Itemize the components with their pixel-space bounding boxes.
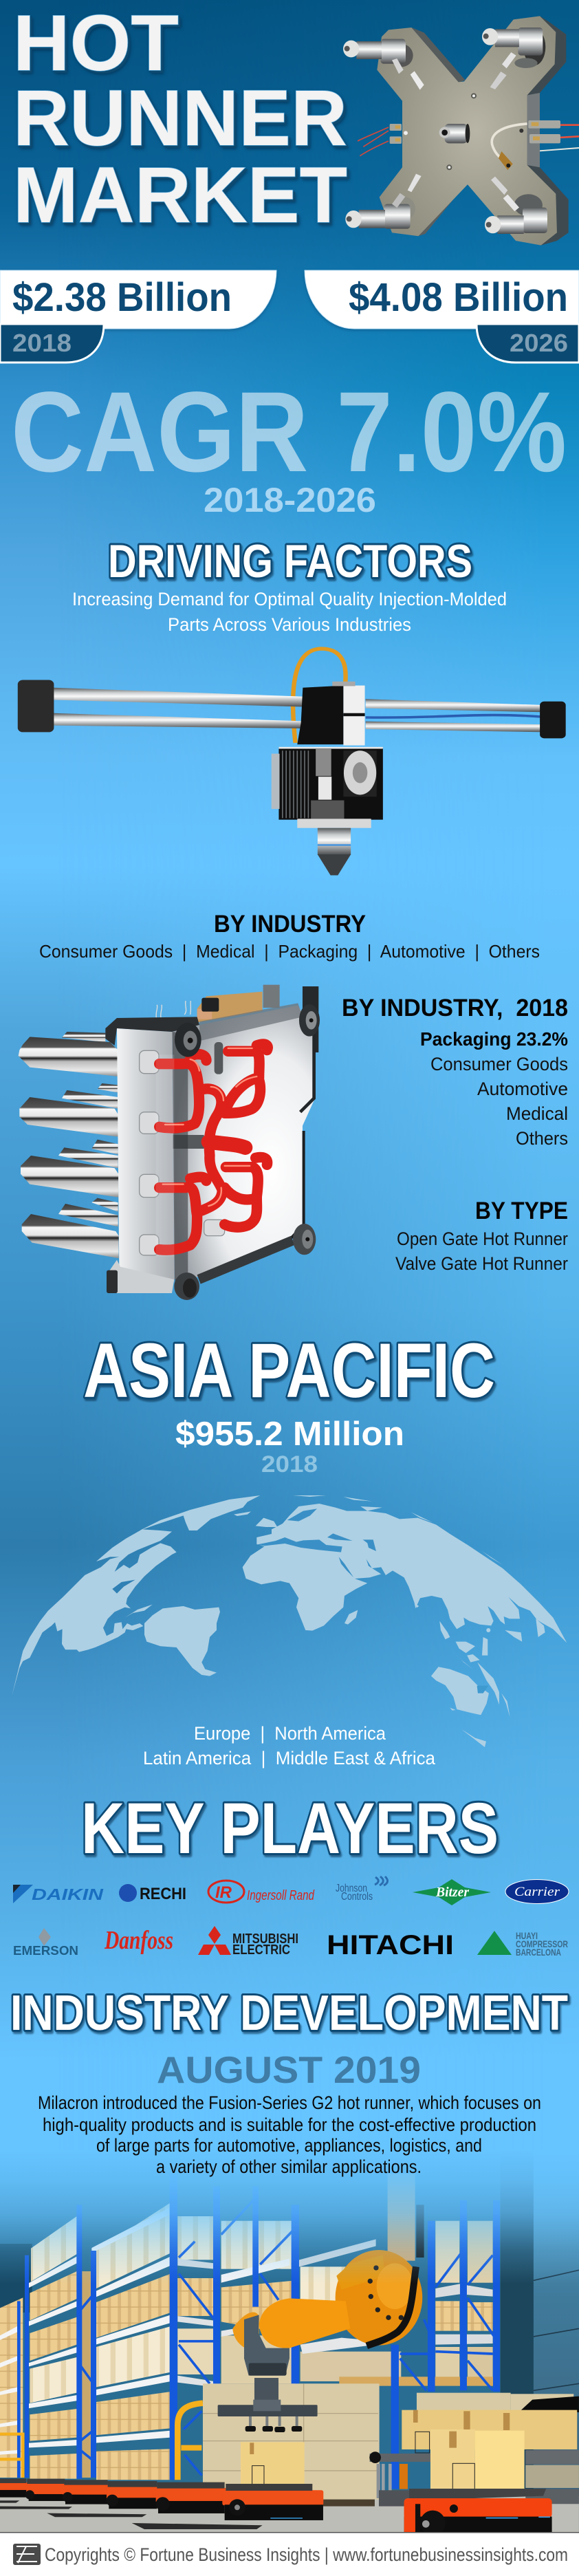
logos row two: Danfoss <box>104 1926 173 1955</box>
logos row two: HITACHI <box>327 1930 454 1960</box>
logos row one: Bitzer <box>435 1885 469 1900</box>
development text <box>38 2092 541 2177</box>
stat: 2018 market size: 2018 <box>12 329 72 357</box>
stat: 2026 market size <box>305 270 579 362</box>
rack uprights <box>19 2174 496 2489</box>
title: RUNNER <box>13 74 347 162</box>
heading: by industry: BY INDUSTRY <box>214 911 366 938</box>
logos row one: RECHI <box>140 1885 186 1903</box>
logos row two <box>13 1926 568 1960</box>
image: hot runner manifold plate <box>343 16 579 246</box>
list: by industry 2018 <box>342 995 568 1149</box>
warehouse top fade <box>0 2150 579 2284</box>
nozzle: top left <box>343 39 424 90</box>
warehouse scene <box>0 2141 579 2535</box>
list: by industry 2018: Automotive <box>477 1079 568 1099</box>
logos row one: IR <box>215 1883 232 1902</box>
industry list: Consumer Goods | Medical | Packaging | Automotive | Others <box>39 941 540 962</box>
logos row one: Controls <box>341 1891 373 1903</box>
logos row one <box>13 1876 569 1905</box>
title: HOT <box>13 0 179 87</box>
list: by industry 2018: Medical <box>506 1103 568 1124</box>
world map <box>12 1495 567 1747</box>
AGV robots <box>0 2478 552 2535</box>
title <box>13 0 347 239</box>
CAGR period: 2018-2026 <box>204 481 376 519</box>
floor plates <box>0 2500 263 2529</box>
stat: 2018 market size: $2.38 Billion <box>12 275 232 320</box>
nozzle: bottom left <box>345 174 422 229</box>
footer <box>0 2532 579 2576</box>
storage racks shelves <box>0 2207 493 2455</box>
development text: of large parts for automotive, appliances, logistics, and <box>96 2135 482 2156</box>
heading: key players: KEY PLAYERS <box>81 1788 499 1869</box>
image: linear rail print head <box>18 649 566 875</box>
other regions list: Latin America | Middle East & Africa <box>143 1748 436 1768</box>
logos row one: Ingersoll Rand <box>247 1888 315 1903</box>
list: by industry 2018: Consumer Goods <box>430 1054 568 1074</box>
list: by type: BY TYPE <box>475 1198 568 1224</box>
heading: driving factors: DRIVING FACTORS <box>108 535 472 587</box>
nozzle: top right <box>482 28 545 89</box>
list: by type <box>395 1198 568 1274</box>
list: by industry 2018: BY INDUSTRY, 2018 <box>342 995 568 1021</box>
nozzle: bottom right <box>485 177 547 234</box>
development text: a variety of other similar applications. <box>156 2156 422 2177</box>
driving factors text: Increasing Demand for Optimal Quality Injection-Molded <box>72 589 507 609</box>
date: AUGUST 2019 <box>157 2048 421 2091</box>
list: by industry 2018: Packaging 23.2% <box>420 1028 568 1050</box>
yellow guard rails <box>0 2403 203 2480</box>
logos row two: BARCELONA <box>516 1947 561 1958</box>
stat: 2026 market size: 2026 <box>510 329 568 357</box>
stat: 2018 market size <box>0 270 276 362</box>
stacked cartons <box>203 2383 579 2507</box>
heading: asia pacific: ASIA PACIFIC <box>83 1328 495 1414</box>
logos row one: DAIKIN <box>32 1885 103 1903</box>
logos row two: HUAYI <box>516 1930 538 1941</box>
list: by industry 2018: Others <box>516 1128 568 1149</box>
logos row one: Carrier <box>514 1885 560 1899</box>
driving factors text <box>72 589 507 635</box>
other regions list <box>143 1723 436 1768</box>
title: MARKET <box>13 151 347 239</box>
driving factors text: Parts Across Various Industries <box>168 614 411 635</box>
asia pacific year: 2018 <box>261 1451 318 1478</box>
logos row two: EMERSON <box>13 1944 78 1958</box>
logos row two: MITSUBISHI <box>232 1931 298 1947</box>
logos row two: ELECTRIC <box>232 1942 290 1958</box>
logos row one: Johnson <box>336 1883 367 1894</box>
other regions list: Europe | North America <box>194 1723 386 1744</box>
stat: 2026 market size: $4.08 Billion <box>349 275 568 320</box>
image: mold with red runner channels <box>19 985 320 1300</box>
robot arm <box>218 2174 422 2432</box>
storage racks boxes <box>0 2202 500 2480</box>
asia pacific value: $955.2 Million <box>175 1416 404 1453</box>
